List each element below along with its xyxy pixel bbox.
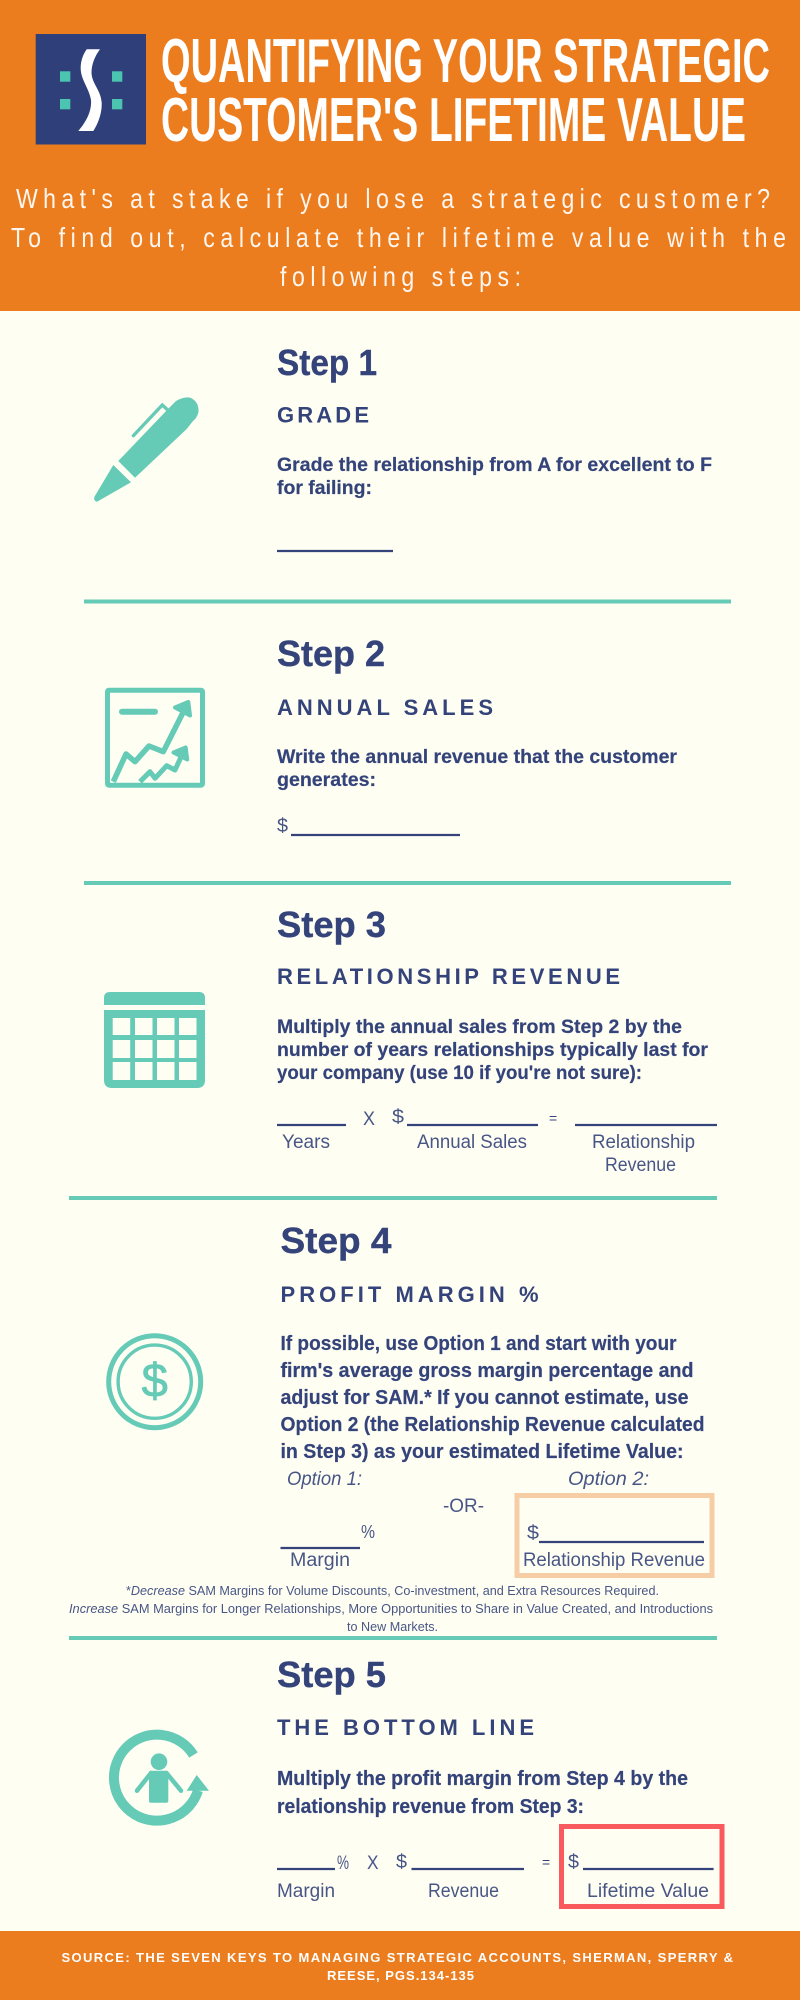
step 4 instructions: adjust for SAM.* If you cannot estimate, use: [280, 1387, 688, 1409]
step 2 instructions: [277, 746, 677, 791]
icon: dollar coin: [109, 1336, 201, 1428]
option 1: Margin: [290, 1550, 350, 1571]
step 5 subheading: THE BOTTOM LINE: [277, 1715, 534, 1740]
option 2: Option 2:: [568, 1469, 649, 1490]
option 2: Relationship Revenue: [523, 1550, 705, 1571]
step 1 instructions: Grade the relationship from A for excellent to F: [277, 454, 712, 476]
icon: rising chart: [108, 690, 202, 785]
step 3 instructions: number of years relationships typically last for: [277, 1039, 708, 1061]
step 4 subheading: PROFIT MARGIN %: [280, 1282, 538, 1307]
step 2 subheading: ANNUAL SALES: [277, 695, 493, 720]
relationship revenue formula: Years: [282, 1132, 330, 1153]
lifetime value box: $: [568, 1852, 579, 1873]
footnote: [69, 1583, 713, 1634]
subtitle: What's at stake if you lose a strategic customer?: [16, 184, 770, 214]
header panel: [0, 0, 800, 311]
option 2: $: [527, 1523, 539, 1544]
lifetime value box: Lifetime Value: [587, 1881, 709, 1902]
relationship revenue formula: X: [363, 1109, 375, 1130]
panel: step 4: [69, 1220, 713, 1634]
icon: dollar coin: $: [142, 1354, 168, 1406]
step 4 heading: Step 4: [280, 1220, 392, 1261]
step 1 instructions: for failing:: [277, 477, 372, 499]
step 5 instructions: relationship revenue from Step 3:: [277, 1796, 584, 1818]
panel: step 1: [94, 342, 712, 551]
subtitle: following steps:: [280, 262, 521, 292]
lifetime value formula: $: [396, 1852, 407, 1873]
step 5 instructions: Multiply the profit margin from Step 4 by the: [277, 1768, 688, 1790]
icon: calendar: [104, 992, 205, 1088]
step 4 instructions: Option 2 (the Relationship Revenue calculated: [280, 1414, 704, 1436]
option 1: [280, 1469, 375, 1571]
subtitle: [11, 184, 786, 292]
relationship revenue formula: Revenue: [605, 1155, 676, 1176]
lifetime value formula: %: [337, 1853, 349, 1874]
step 4 instructions: in Step 3) as your estimated Lifetime Value:: [280, 1441, 684, 1463]
relationship revenue formula: Annual Sales: [417, 1132, 527, 1153]
panel: step 5: [114, 1654, 722, 1906]
step 5 instructions: [277, 1768, 688, 1818]
option 2: [517, 1469, 712, 1576]
step 1 heading: Step 1: [277, 342, 377, 383]
subtitle: To find out, calculate their lifetime value with the: [11, 223, 786, 253]
step 2 instructions: generates:: [277, 769, 376, 791]
footer source: SOURCE: THE SEVEN KEYS TO MANAGING STRATEGIC ACCOUNTS, SHERMAN, SPERRY &: [62, 1950, 733, 1965]
panel: step 3: [104, 904, 717, 1176]
option 1: Option 1:: [287, 1469, 362, 1490]
lifetime value formula: X: [367, 1853, 379, 1874]
option 1: %: [361, 1522, 375, 1542]
lifetime value box: [562, 1826, 722, 1906]
lifetime value formula: =: [542, 1854, 550, 1870]
step 1 subheading: GRADE: [277, 402, 369, 428]
lifetime value formula: [277, 1852, 550, 1902]
icon: pen: [94, 397, 199, 502]
footnote: *Decrease SAM Margins for Volume Discounts, Co-investment, and Extra Resources Required.: [126, 1583, 659, 1598]
relationship revenue formula: =: [549, 1110, 557, 1126]
step 3 instructions: your company (use 10 if you're not sure):: [277, 1062, 642, 1084]
lifetime value formula: Revenue: [428, 1881, 499, 1902]
or divider text: -OR-: [443, 1496, 484, 1517]
logo: [36, 34, 146, 144]
relationship revenue formula: $: [392, 1107, 404, 1128]
icon: customer cycle: [114, 1735, 209, 1821]
relationship revenue formula: [277, 1107, 717, 1176]
annual sales blank: $: [277, 816, 288, 837]
title: [161, 27, 770, 155]
step 4 instructions: If possible, use Option 1 and start with your: [280, 1333, 677, 1355]
lifetime value formula: Margin: [277, 1881, 335, 1902]
step 1 instructions: [277, 454, 712, 499]
step 5 heading: Step 5: [277, 1654, 386, 1695]
step 2 instructions: Write the annual revenue that the customer: [277, 746, 677, 768]
footer source: REESE, PGS.134-135: [327, 1968, 474, 1983]
footnote: Increase SAM Margins for Longer Relationships, More Opportunities to Share in Value Created, and Introductions: [69, 1601, 713, 1616]
step 3 subheading: RELATIONSHIP REVENUE: [277, 964, 620, 989]
grade blank: [277, 550, 393, 552]
step 3 instructions: Multiply the annual sales from Step 2 by the: [277, 1016, 682, 1038]
step 3 instructions: [277, 1016, 708, 1084]
step 3 heading: Step 3: [277, 904, 386, 945]
step 2 heading: Step 2: [277, 633, 385, 674]
relationship revenue formula: Relationship: [592, 1132, 695, 1153]
panel: step 2: [108, 633, 677, 837]
step 4 instructions: [280, 1333, 704, 1463]
footer source: [0, 1931, 800, 2000]
footnote: to New Markets.: [347, 1619, 438, 1634]
step 4 instructions: firm's average gross margin percentage and: [280, 1360, 694, 1382]
